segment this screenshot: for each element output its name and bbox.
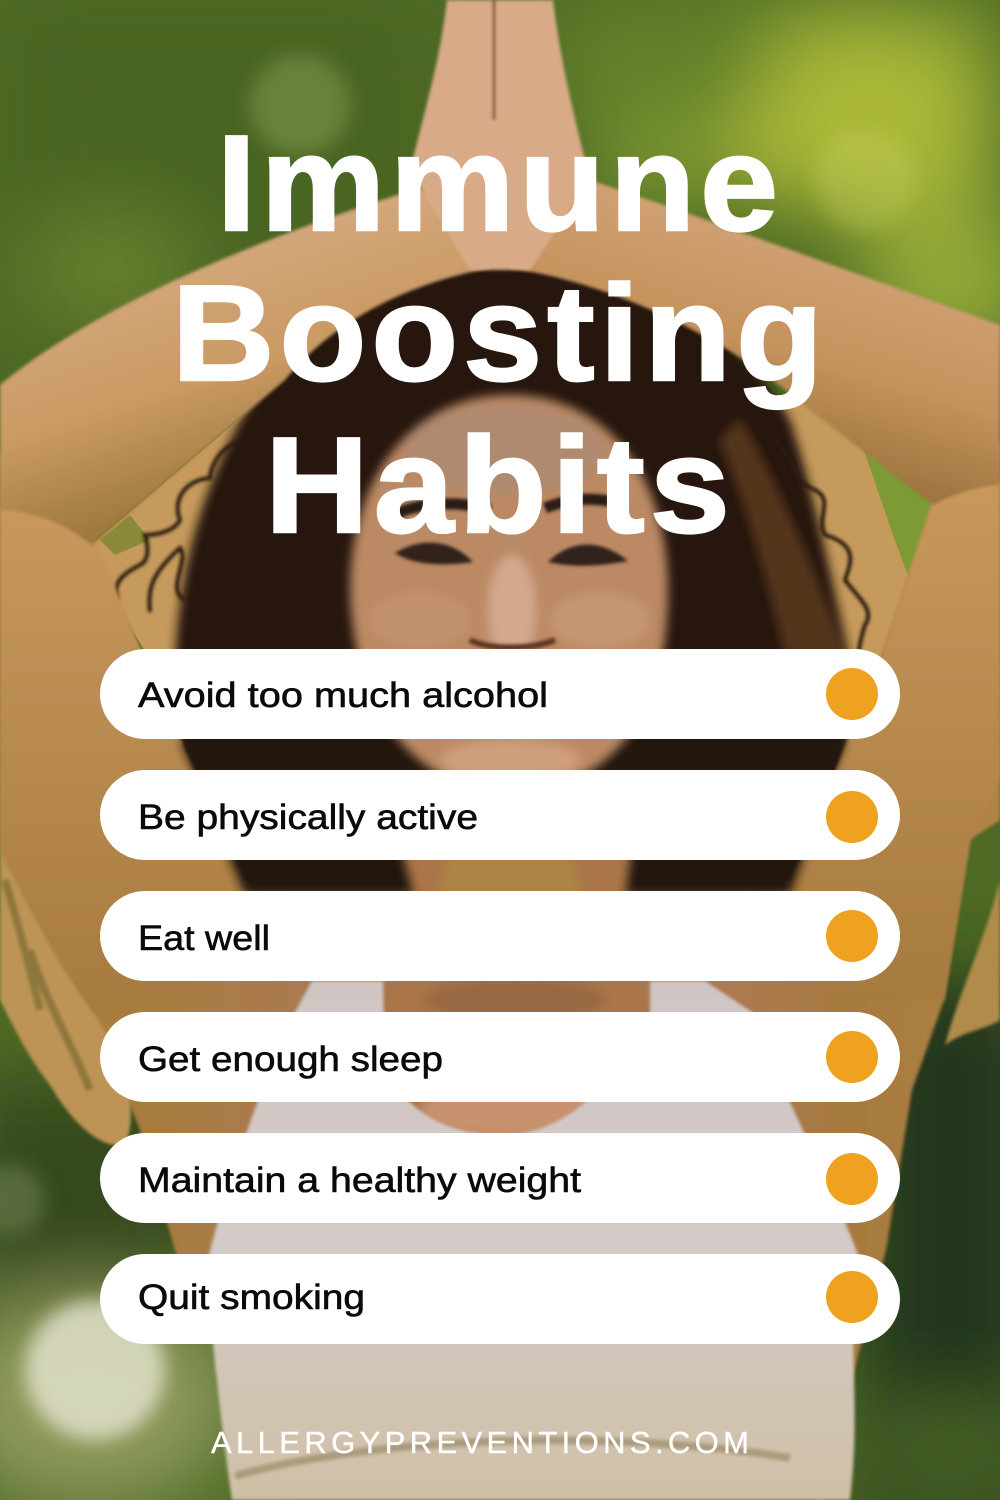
forearms: [0, 180, 1000, 545]
title: Boosting: [172, 257, 828, 409]
footer website: ALLERGYPREVENTIONS.COM: [211, 1425, 749, 1460]
body: arms, shoulders and torso: [0, 440, 1000, 1500]
habit 2: Be physically active: [138, 798, 478, 837]
hair beside neck: [180, 740, 845, 895]
habit 4: Get enough sleep: [138, 1040, 443, 1079]
habit 3: Eat well: [138, 919, 270, 958]
praying hands: [410, 0, 590, 270]
face: [350, 395, 668, 800]
title: [172, 107, 828, 561]
habit 3: [100, 891, 900, 981]
habit 4: [100, 1012, 900, 1102]
habit 1: Avoid too much alcohol: [138, 676, 548, 715]
habit 6: [100, 1254, 900, 1344]
dark curls at hair edge: [116, 440, 868, 655]
habit 1: [100, 649, 900, 739]
title: Habits: [265, 409, 735, 561]
habit 5: [100, 1133, 900, 1223]
habit 6: Quit smoking: [138, 1278, 365, 1317]
fitted top: [205, 981, 860, 1500]
title: Immune: [217, 107, 783, 259]
upper arms: [0, 480, 1000, 1020]
habit 5: Maintain a healthy weight: [138, 1161, 581, 1200]
hair back: [175, 250, 850, 890]
eyebrows and eyes: [393, 499, 628, 648]
habit 2: [100, 770, 900, 860]
neck and chest: [300, 790, 700, 1136]
habit list: [100, 649, 900, 1344]
left curly hair fall: [0, 850, 1000, 1146]
arm-gap backdrop: sunlit hair and green: [85, 380, 940, 660]
